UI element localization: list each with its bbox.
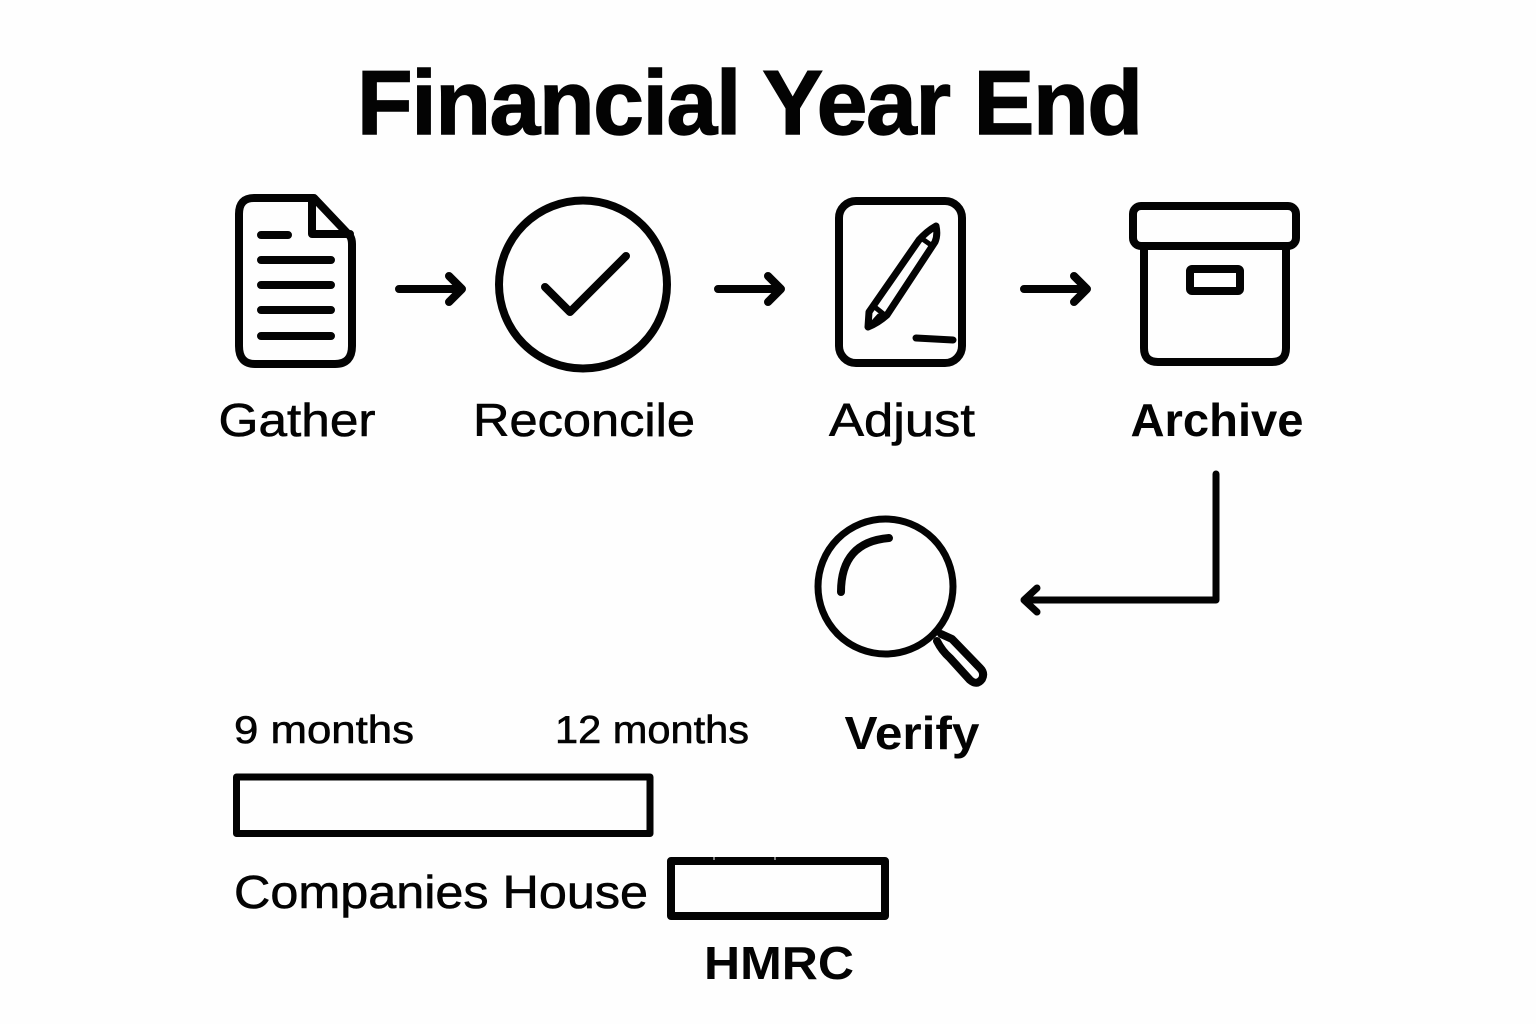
label: Adjust: Adjust xyxy=(829,394,975,446)
icon: magnifying glass xyxy=(818,519,983,683)
arrow: gather to reconcile xyxy=(399,276,462,302)
icon: document xyxy=(239,198,352,364)
label: Gather: Gather xyxy=(218,394,376,446)
bar: Companies House deadline xyxy=(236,777,650,834)
label: 12 months: 12 months xyxy=(555,709,749,752)
label: HMRC: HMRC xyxy=(704,937,854,989)
icon: tablet and pencil xyxy=(839,201,962,363)
title: Financial Year End xyxy=(357,53,1143,154)
label: 9 months: 9 months xyxy=(234,709,414,752)
icon: check circle xyxy=(499,200,667,368)
icon: archive box xyxy=(1133,206,1296,362)
arrow: adjust to archive xyxy=(1024,276,1087,302)
arrow: archive to verify xyxy=(1024,474,1216,612)
label: Archive: Archive xyxy=(1130,394,1304,446)
bar: HMRC deadline xyxy=(671,857,885,916)
arrow: reconcile to adjust xyxy=(718,276,781,302)
label: Verify: Verify xyxy=(844,707,980,759)
label: Companies House: Companies House xyxy=(234,866,648,918)
label: Reconcile: Reconcile xyxy=(473,394,695,446)
